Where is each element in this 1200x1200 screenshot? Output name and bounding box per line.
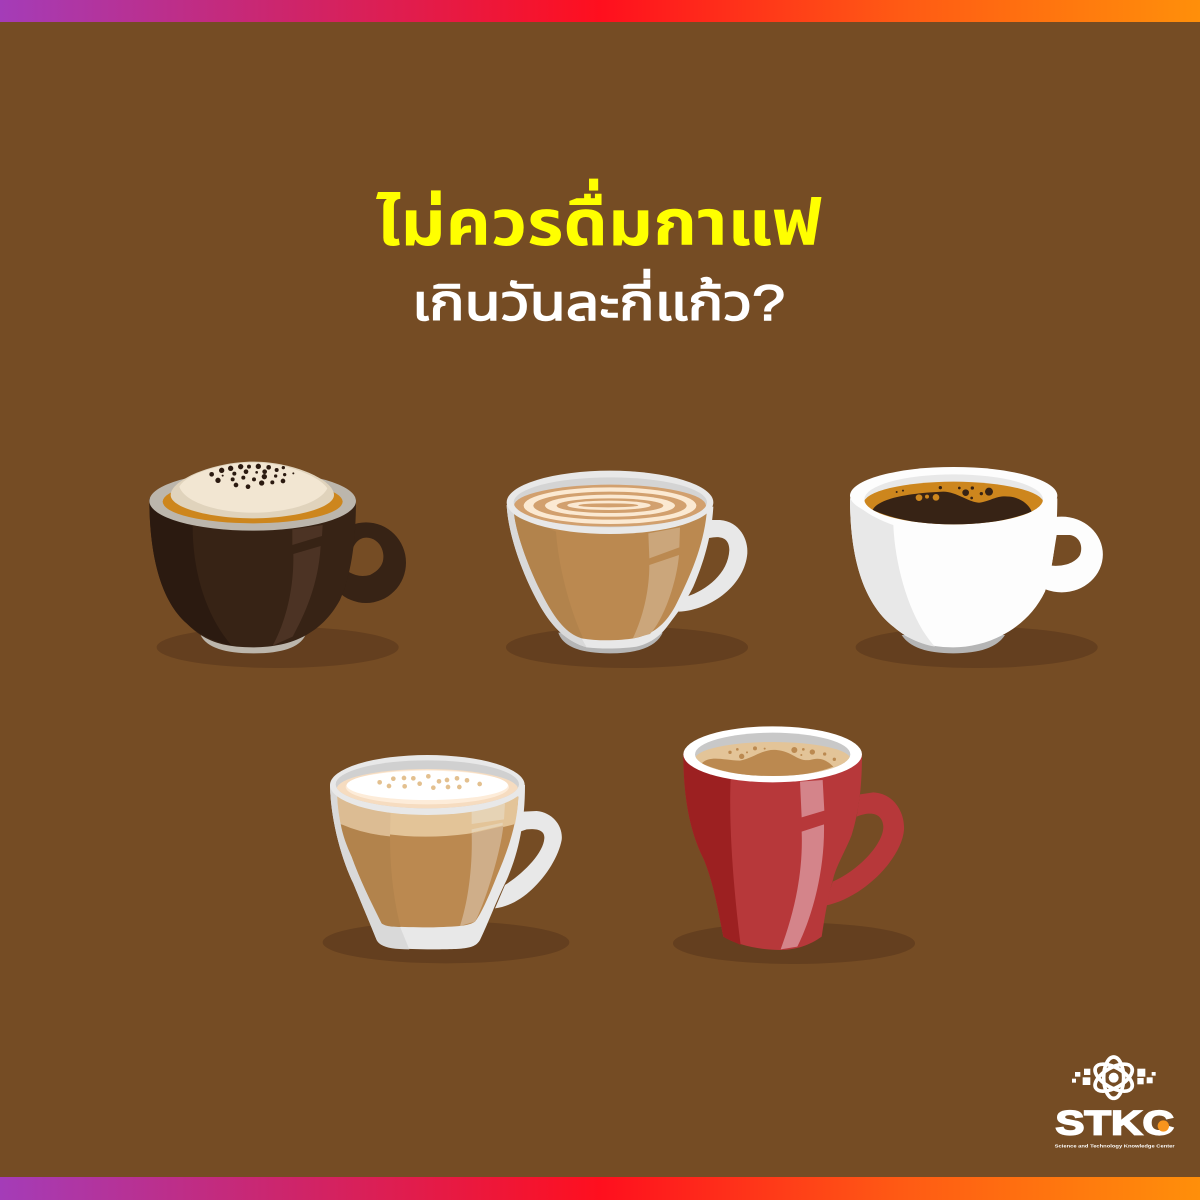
coffee [514, 513, 707, 640]
logo tagline: Science and Technology Knowledge Center [1055, 1143, 1175, 1148]
cocoa dots [377, 774, 482, 790]
rim inside [336, 760, 519, 808]
milk layer [337, 797, 518, 837]
foot [902, 635, 1005, 653]
heading line 2: เกินวันละกี่แก้ว? [412, 269, 785, 331]
foam [337, 769, 518, 809]
cup: glass cappuccino [323, 755, 569, 963]
highlights [781, 780, 824, 949]
body shade [149, 498, 232, 646]
body [683, 753, 862, 950]
rim inside [864, 474, 1043, 524]
title [376, 178, 822, 331]
rim inside [514, 477, 707, 527]
foot [558, 633, 663, 653]
coffee layer [337, 797, 518, 927]
bottom gradient bar [0, 1177, 1200, 1200]
body shade [683, 753, 741, 945]
cup: dark cappuccino [149, 462, 406, 668]
highlights [460, 826, 503, 926]
bubbles [896, 486, 993, 501]
body [850, 498, 1057, 647]
rim [850, 467, 1057, 524]
handle [495, 811, 562, 908]
heading line 1: ไม่ควรดื่มกาแฟ [376, 178, 822, 259]
body shade [850, 498, 935, 647]
foam [171, 462, 334, 518]
glass body [507, 505, 713, 649]
cup: latte art [506, 471, 748, 668]
handle [825, 792, 904, 906]
bubbles [728, 746, 836, 761]
milk layer shade [337, 797, 391, 836]
highlights [273, 525, 323, 646]
logo wordmark: STKC [1055, 1105, 1174, 1143]
logo: STKC [1055, 1057, 1175, 1148]
shadow [673, 923, 915, 964]
handle [326, 522, 406, 603]
latte surface [514, 485, 706, 527]
coffee surface [695, 742, 850, 777]
glass body [330, 785, 525, 949]
crema [163, 480, 343, 523]
cocoa dots [209, 464, 294, 489]
icon: pixels [1072, 1069, 1156, 1085]
coffee shade [341, 824, 401, 927]
glass shade [330, 785, 409, 949]
handle [1020, 517, 1103, 592]
rim [507, 471, 713, 534]
rim [149, 471, 356, 531]
foot [201, 635, 305, 653]
body [149, 498, 356, 647]
handle [678, 520, 747, 612]
foam top [179, 463, 327, 513]
highlights [633, 527, 680, 639]
shadow [323, 921, 569, 963]
shadow [157, 627, 399, 668]
icon: atom [1091, 1057, 1137, 1098]
top gradient bar [0, 0, 1200, 22]
coffee shade [514, 513, 583, 639]
shadow [506, 627, 748, 668]
glass shade [507, 505, 587, 647]
logo dot [1158, 1120, 1169, 1132]
rim [330, 755, 525, 815]
coffee surface [864, 482, 1044, 525]
cup: black coffee [850, 467, 1103, 668]
cup: red mug [673, 726, 915, 964]
rim inside [695, 733, 850, 776]
rim [683, 726, 862, 782]
shadow [856, 627, 1098, 668]
